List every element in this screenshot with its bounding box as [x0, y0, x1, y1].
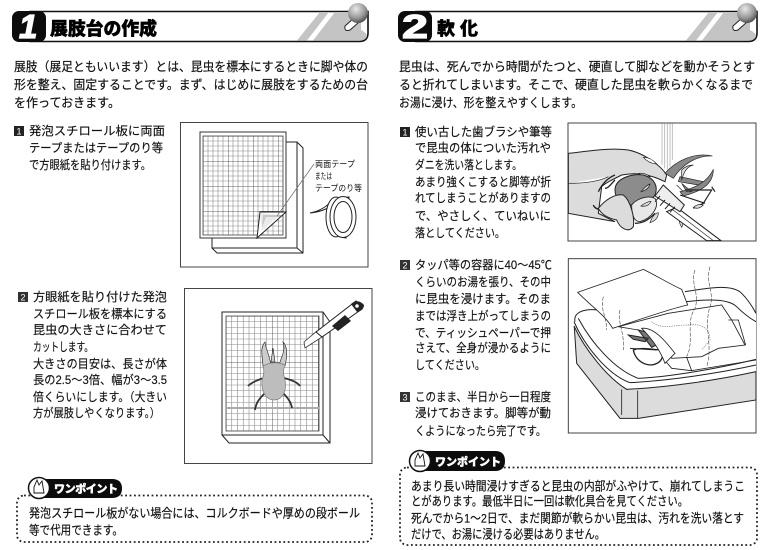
container [574, 287, 756, 418]
section title: 軟 化 [437, 18, 478, 39]
icon: pin [733, 3, 757, 30]
text block: section 1 intro: 展肢（展足ともいいます）とは、昆虫を標本にするときに脚や体の [14, 59, 368, 74]
text block: section 1 intro [14, 59, 368, 110]
tissue [618, 305, 756, 371]
text block: section 2 step 1: で昆虫の体についた汚れや [415, 141, 551, 155]
text block: section 2 step 1: あまり強くこすると脚等が折 [415, 174, 551, 189]
callout: section 1 one point [17, 478, 372, 542]
illustration: paper and tape panel [180, 122, 368, 267]
illustration: soaking in a container panel [568, 259, 756, 433]
callout: section 1 one point: 等で代用できます。 [29, 522, 123, 538]
text block: section 2 intro: 昆虫は、死んでから時間がたつと、硬直して脚などを動かそうとす [399, 59, 755, 74]
hand back [568, 149, 667, 222]
text block: section 2 intro [399, 59, 755, 110]
text block: section 1 step 2: スチロール板を標本にする [33, 307, 167, 321]
label: one point: ワンポイント [435, 456, 501, 468]
label: tape callout [315, 159, 362, 193]
heading: section 2 [398, 3, 757, 45]
text block: section 1 intro: を作っておきます。 [14, 96, 120, 110]
text block: section 1 step 1: 発泡スチロール板に両面 [29, 124, 165, 138]
text block: section 2 step 3: このまま、半日から一日程度 [415, 389, 551, 404]
label: one point [28, 478, 122, 498]
icon: beetle [248, 342, 300, 410]
label: one point: ワンポイント [54, 482, 118, 496]
text block: section 2 step 2: に昆虫を浸けます。そのま [415, 292, 551, 306]
heading: section 1 [12, 3, 368, 45]
section title: 展肢台の作成 [50, 18, 157, 39]
text block: section 2 step 1: ダニを洗い落とします。 [415, 157, 522, 172]
text block: section 2 step 2 [400, 258, 552, 372]
text block: section 2 step 3: くようになったら完了です。 [415, 424, 546, 438]
text block: section 1 step 2: 倍くらいにします。（大きい [33, 389, 167, 404]
text block: section 2 step 3: 浸けておきます。脚等が動 [415, 405, 551, 420]
text block: section 1 step 2: カットします。 [33, 340, 93, 354]
text block: section 2 step 2: さえて、全身が浸かるように [415, 340, 551, 355]
callout: section 1 one point: 発泡スチロール板がない場合には、コルクボードや厚めの段ボール [29, 506, 360, 520]
callout: section 2 one point [400, 450, 757, 545]
text block: section 2 step 2: くらいのお湯を張り、その中 [415, 274, 551, 289]
label: tape callout: テープのり等 [315, 182, 362, 193]
text block: section 1 intro: 形を整え、固定することです。まず、はじめに展肢をするための台 [14, 77, 368, 92]
text block: section 2 step 2: で、ティッシュペーパーで押 [415, 326, 551, 340]
text block: section 2 step 1: 使い古した歯ブラシや筆等 [415, 124, 552, 139]
text block: section 1 step 2: 大きさの目安は、長さが体 [33, 356, 167, 371]
text block: section 2 step 1: れてしまうことがありますの [415, 190, 551, 205]
text block: section 2 step 3 [400, 389, 551, 438]
section number 1: 1 [19, 8, 37, 45]
text block: section 1 step 2 [18, 289, 167, 420]
text block: section 1 step 2: 長の2.5～3倍、幅が3～3.5 [33, 372, 167, 387]
text block: section 1 step 2: 方が展肢しやくなります。） [33, 405, 160, 420]
icon: pin [345, 3, 368, 30]
text block: section 2 step 2: タッパ等の容器に40～45℃ [415, 258, 552, 272]
text block: section 2 step 1: 落としてください。 [415, 226, 505, 240]
text block: section 2 step 2: してください。 [415, 358, 485, 372]
thumb [598, 195, 634, 230]
label: tape callout: または [315, 171, 332, 181]
icon: tape roll [310, 196, 356, 238]
text block: section 2 step 2: 2 [402, 260, 408, 270]
text block: section 2 step 1: で、やさしく、ていねいに [415, 209, 551, 223]
illustration: brushing the beetle panel [568, 123, 756, 241]
beetle [593, 155, 715, 227]
label: tape callout: 両面テープ [315, 159, 355, 169]
text block: section 2 intro: ると折れてしまいます。そこで、硬直した昆虫を軟らかくなるまで [399, 77, 753, 92]
beetle in water [628, 328, 675, 365]
toothbrush [655, 185, 721, 241]
text block: section 2 step 2: までは浮き上がってしまうの [415, 308, 551, 323]
text block: section 1 step 1: 1 [16, 126, 22, 136]
text block: section 2 step 1 [400, 124, 552, 240]
label: one point [410, 450, 505, 472]
text block: section 1 step 2: 昆虫の大きさに合わせて [33, 323, 167, 337]
text block: section 1 step 1: で方眼紙を貼り付けます。 [29, 157, 151, 172]
text block: section 1 step 2: 方眼紙を貼り付けた発泡 [33, 289, 167, 304]
illustration: cutting the board panel [184, 288, 372, 464]
text block: section 1 step 2: 2 [20, 292, 26, 302]
paper towel [578, 269, 688, 328]
text block: section 2 intro: お湯に浸け、形を整えやすくします。 [399, 96, 582, 110]
text block: section 2 step 3: 3 [402, 392, 408, 402]
text block: section 1 step 1: テープまたはテープのり等 [29, 141, 163, 155]
icon: cutter knife [304, 301, 364, 348]
callout: section 2 one point: だけで、お湯に浸ける必要はありません。 [411, 528, 605, 542]
text block: section 1 step 1 [14, 124, 165, 172]
text block: section 2 step 1: 1 [402, 128, 408, 138]
section number 2: 2 [402, 8, 428, 45]
callout: section 2 one point: とがあります。最低半日に一回は軟化具合を見てください。 [411, 494, 688, 508]
